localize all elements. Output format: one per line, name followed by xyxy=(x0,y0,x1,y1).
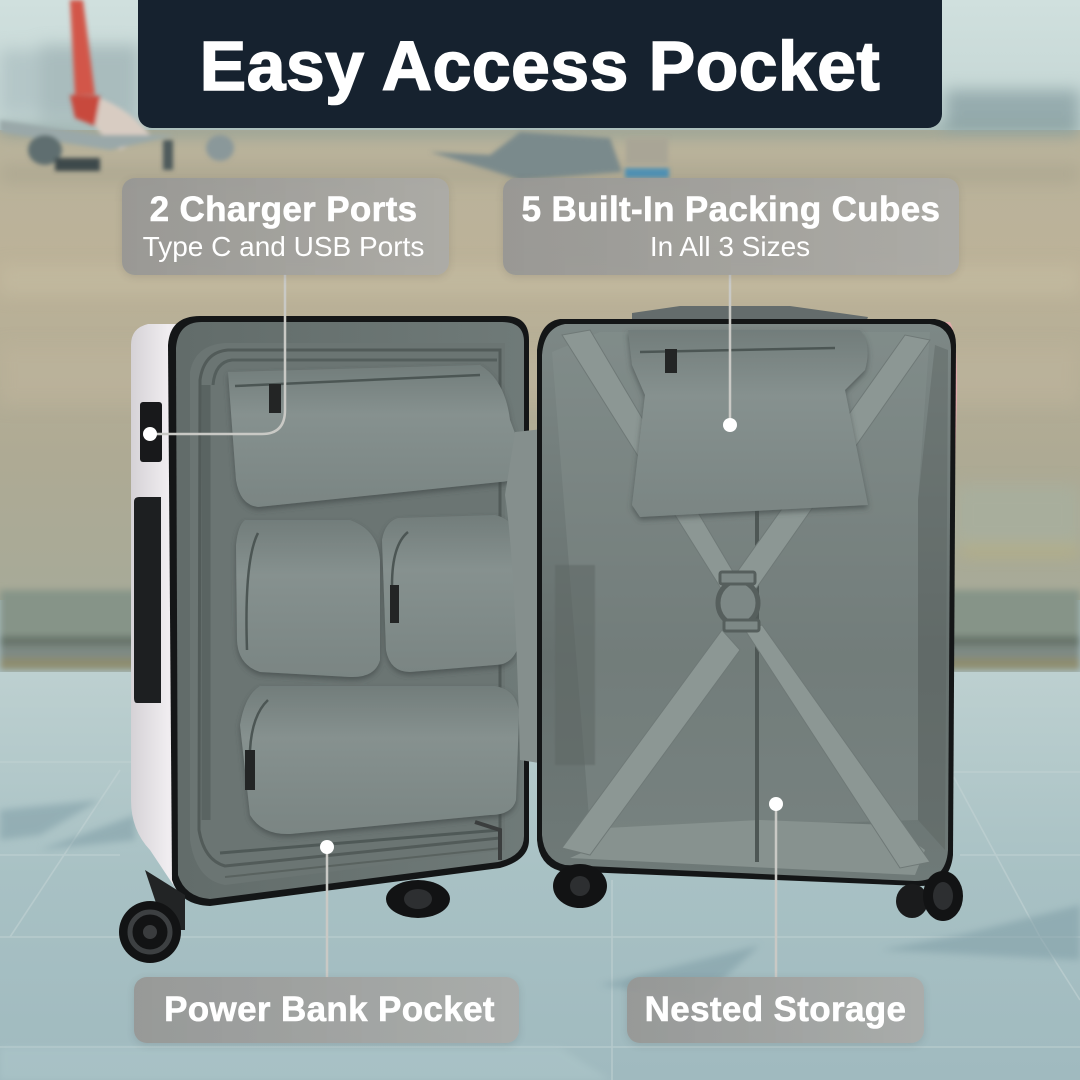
callout: nested storage xyxy=(627,977,924,1043)
callout: packing cubes: In All 3 Sizes xyxy=(650,231,810,262)
left pouches xyxy=(228,365,527,834)
title banner: Easy Access Pocket xyxy=(200,27,880,105)
callout dots xyxy=(143,418,783,854)
callout: charger ports xyxy=(122,178,449,275)
window frame band xyxy=(0,590,1080,670)
right straps xyxy=(562,330,930,868)
callout: power bank pocket xyxy=(134,977,519,1043)
hinge lining flap xyxy=(505,428,552,765)
right pouch xyxy=(628,330,868,517)
title banner xyxy=(138,0,942,128)
right suitcase shell xyxy=(537,306,957,886)
wheels xyxy=(119,864,963,963)
callout: packing cubes: 5 Built-In Packing Cubes xyxy=(522,190,940,229)
callout: charger ports: Type C and USB Ports xyxy=(143,231,424,262)
callout leader lines xyxy=(150,274,776,978)
pouch zippers xyxy=(235,375,500,860)
callout: packing cubes xyxy=(503,178,959,275)
callout: charger ports: 2 Charger Ports xyxy=(150,190,417,229)
floor tile lines xyxy=(0,762,1080,1080)
background aircraft xyxy=(0,0,669,180)
left suitcase shell xyxy=(131,316,529,906)
callout: power bank pocket: Power Bank Pocket xyxy=(164,990,495,1029)
callout: nested storage: Nested Storage xyxy=(645,990,906,1029)
